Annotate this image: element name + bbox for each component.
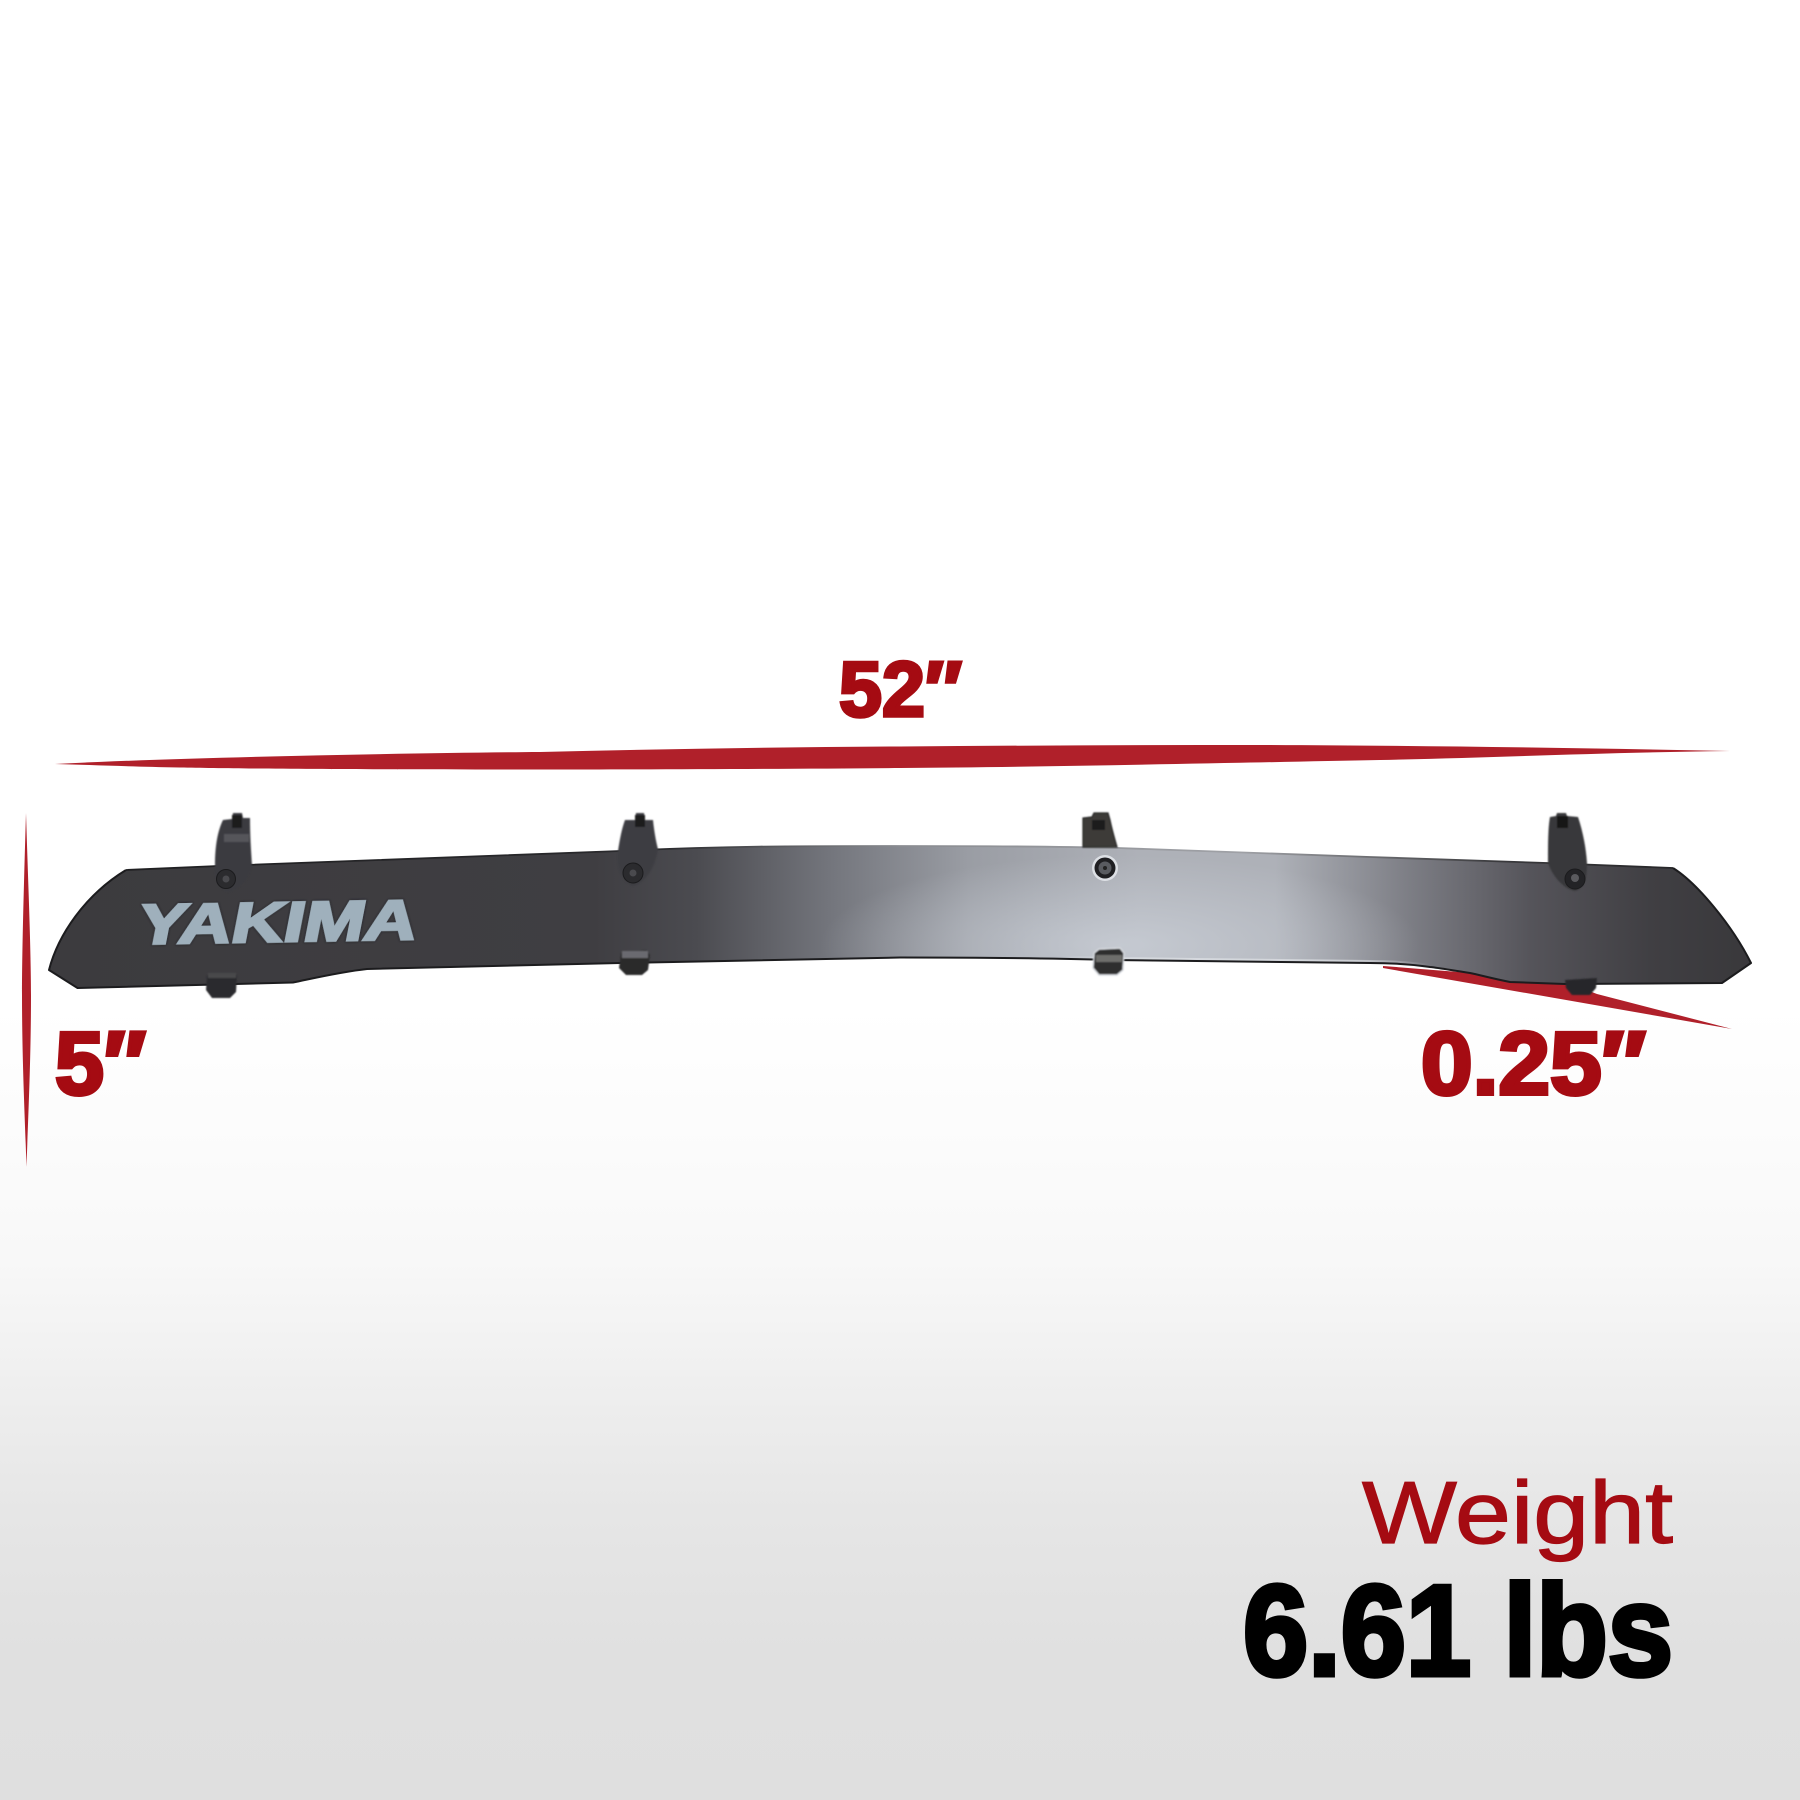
clip: top mount 2 [618, 813, 658, 886]
logo: YAKIMA: YAKIMA [133, 889, 424, 956]
dimension label: 0.25 inches: 0.25″ [1421, 1013, 1646, 1113]
weight value: 6.61 lbs [1243, 1559, 1673, 1703]
product: Yakima wind fairing [49, 813, 1751, 998]
dimension bar: 5 inch height [22, 813, 31, 1167]
clip: top mount 1 [215, 813, 252, 892]
clip: bottom tab 4 [1565, 978, 1597, 995]
dimension label: 52 inches: 52″ [839, 645, 962, 733]
clip: top mount 3 [1083, 813, 1117, 847]
weight heading: Weight [1362, 1463, 1673, 1562]
wing highlight [49, 846, 1751, 988]
clip: bottom tab 3 [1093, 948, 1124, 975]
screw 1 [216, 870, 236, 888]
dimension label: 5 inches: 5″ [55, 1013, 146, 1113]
clip: bottom tab 1 [206, 973, 237, 998]
clip: top mount 4 [1548, 813, 1587, 891]
clip: bottom tab 2 [619, 950, 650, 975]
dimension bar: 52 inch length [55, 745, 1730, 770]
screw 2 [623, 863, 643, 883]
dimension wedge: 0.25 inch thickness [1383, 966, 1732, 1029]
screw 4 [1565, 869, 1585, 889]
wing body [49, 846, 1751, 988]
screw 3 [1092, 855, 1118, 881]
